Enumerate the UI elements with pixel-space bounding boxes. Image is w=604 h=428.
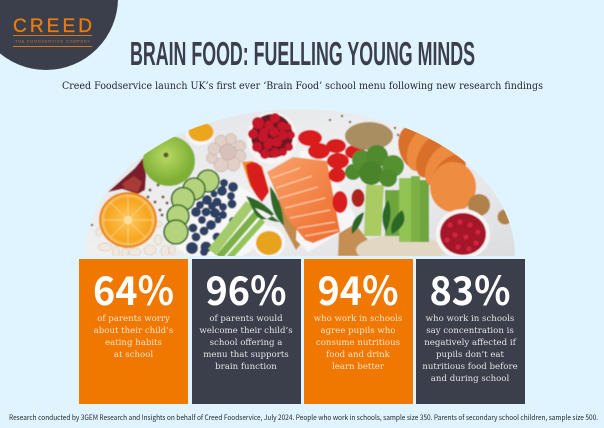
stat description: and during school: [431, 374, 509, 384]
icon: seeds pile: [345, 122, 444, 265]
icon: spinach leaves: [352, 200, 404, 234]
icon: red pepper: [242, 161, 269, 202]
stat number 83%: 83%: [430, 260, 510, 317]
icon: pomegranate wedge: [108, 158, 146, 194]
stat description: about their child’s: [94, 326, 173, 336]
icon: broccoli: [345, 145, 404, 236]
stat description: menu that supports: [203, 350, 289, 360]
icon: pomegranate seeds bowl: [436, 209, 490, 259]
icon: turmeric bowl: [186, 122, 214, 146]
stat description: food and drink: [326, 350, 391, 360]
icon: blueberries: [186, 179, 238, 256]
stat description: welcome their child’s: [199, 326, 293, 336]
icon: herb leaves: [246, 186, 284, 226]
icon: beans: [96, 221, 175, 258]
stat description: say concentration is: [426, 326, 514, 336]
icon: celery diagonal: [212, 204, 263, 258]
stat description: pupils don’t eat: [436, 350, 505, 360]
logo badge: CREED: [13, 16, 92, 37]
icon: white plate: [176, 185, 266, 256]
stat description: agree pupils who: [321, 326, 395, 336]
stat number 96%: 96%: [206, 260, 286, 317]
stat number 94%: 94%: [318, 260, 398, 317]
icon: wooden board and paper: [296, 150, 368, 256]
stat description: negatively affected if: [424, 338, 517, 348]
stat description: school offering a: [210, 338, 282, 348]
stat description: at school: [114, 350, 153, 360]
icon: bowl of red berries: [247, 112, 297, 164]
stat number 64%: 64%: [93, 260, 174, 317]
panel: 96% stat: [192, 259, 301, 404]
panel: 64% stat: [79, 259, 188, 404]
icon: lentils scatter: [91, 115, 399, 226]
icon: garlic: [206, 134, 246, 172]
icon: honey bowl: [254, 226, 285, 256]
stat description: of parents worry: [97, 314, 170, 324]
stat description: nutritious food before: [422, 362, 518, 372]
icon: tomatoes: [298, 130, 365, 213]
stat description: learn better: [332, 362, 385, 372]
icon: walnuts: [468, 194, 512, 224]
icon: cucumber slices: [164, 170, 219, 244]
panel: 83% stat: [416, 259, 525, 404]
stat description: who work in schools: [426, 314, 514, 324]
subtitle: Creed Foodservice launch UK’s first ever ‘Brain Food’ school menu following new research findings: [62, 81, 543, 92]
logo badge: [0, 0, 118, 70]
icon: celery sticks: [385, 176, 429, 242]
stat description: who work in schools: [314, 314, 402, 324]
stat description: eating habits: [105, 338, 162, 348]
panel: 94% stat: [304, 259, 413, 404]
icon: salmon fillet: [267, 157, 340, 243]
stat description: consume nutritious: [316, 338, 400, 348]
food photo semicircle: [85, 105, 515, 265]
icon: cutting board: [278, 199, 301, 250]
icon: orange: [99, 192, 157, 248]
stat description: brain function: [215, 362, 277, 372]
icon: apple: [143, 136, 195, 186]
logo badge: THE FOODSERVICE COMPANY: [15, 38, 90, 44]
stat description: of parents would: [209, 314, 283, 324]
icon: sweet potato: [398, 128, 476, 212]
